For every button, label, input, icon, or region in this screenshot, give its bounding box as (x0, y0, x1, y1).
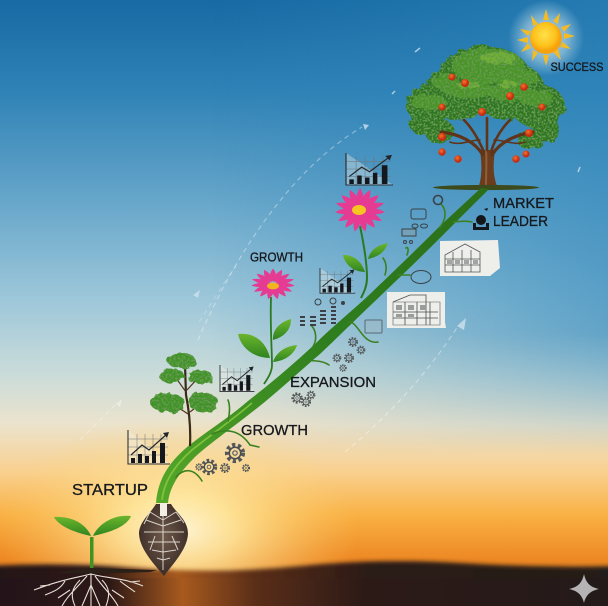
sprout left leaf (54, 517, 91, 536)
sprout roots (34, 572, 143, 606)
label: growth upper: GROWTH (250, 250, 303, 264)
sprout stem (90, 537, 94, 568)
tree canopy (406, 46, 565, 149)
market leader icon (473, 208, 489, 230)
tree ground (433, 185, 539, 190)
main growing stem (156, 188, 489, 503)
label: growth lower: GROWTH (241, 422, 308, 439)
small round icons along stem (402, 196, 442, 284)
upper flower leaves (343, 255, 365, 272)
blueprint sheet: upper (440, 240, 500, 276)
flower leaves (238, 334, 270, 358)
dashed growth arcs (80, 48, 580, 452)
label: expansion: EXPANSION (290, 374, 376, 391)
blueprint sheet: lower (387, 292, 446, 328)
upper flower bloom (335, 188, 385, 232)
label: market leader: LEADER (493, 213, 548, 230)
small bar icons (300, 298, 345, 326)
chart icon: startup (128, 430, 170, 464)
label: success: SUCCESS (550, 60, 604, 74)
gears: near expansion (292, 338, 364, 406)
label: market leader: MARKET (493, 195, 554, 212)
tree trunk and branches (441, 118, 533, 189)
young tree (151, 353, 218, 446)
label: market leader (493, 195, 554, 230)
seed bulb with roots (139, 503, 188, 576)
stem side shoots (176, 204, 472, 481)
chart icon: expansion (320, 268, 355, 293)
startup sprout (34, 516, 157, 606)
icon: sun (508, 0, 584, 76)
small device icon (365, 320, 382, 333)
pink flower: expansion (335, 188, 388, 298)
pink flower: growth (238, 269, 297, 384)
watermark sparkle (569, 574, 599, 603)
sprout soil (57, 568, 157, 573)
tree: mature fruit tree (406, 46, 565, 190)
tree fruits (438, 74, 546, 163)
sprout right leaf (93, 516, 131, 536)
gears: near growth (196, 445, 249, 474)
label: startup: STARTUP (72, 482, 148, 499)
flower bloom (251, 269, 295, 300)
chart icon: growth (220, 365, 254, 392)
chart icon: market (346, 153, 393, 185)
